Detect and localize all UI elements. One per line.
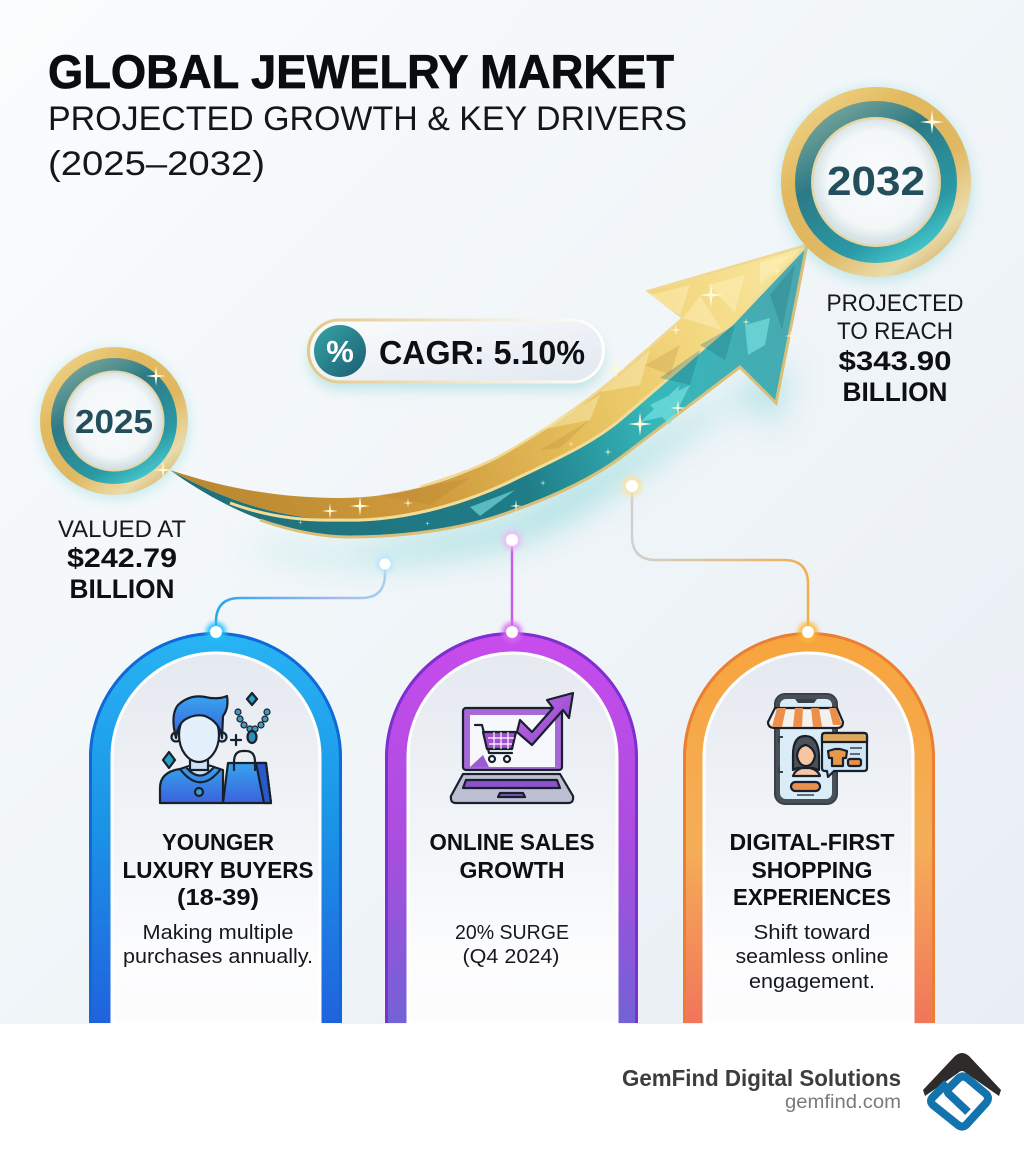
card heading: YOUNGER [162, 829, 274, 855]
start value label [58, 516, 186, 604]
card heading: SHOPPING [752, 857, 872, 883]
arrow lower edge stroke [260, 245, 807, 537]
card heading: EXPERIENCES [733, 884, 891, 910]
end value label: $343.90 [838, 346, 952, 376]
card: digital-first shopping [683, 622, 935, 1023]
card heading: ONLINE SALES [430, 829, 594, 855]
card body: 20% SURGE [455, 922, 569, 944]
brand url: gemfind.com [785, 1092, 901, 1113]
card heading: DIGITAL-FIRST [730, 829, 894, 855]
card body: Making multiple [142, 922, 294, 944]
card body: purchases annually. [123, 946, 313, 968]
subtitle: PROJECTED GROWTH & KEY DRIVERS [48, 100, 687, 138]
card body: engagement. [749, 971, 875, 993]
title: GLOBAL JEWELRY MARKET [48, 45, 674, 98]
date range: (2025–2032) [48, 145, 265, 183]
end value label: BILLION [842, 377, 948, 407]
logo [923, 1053, 1001, 1126]
sparkles [298, 267, 797, 526]
end value label: TO REACH [837, 318, 953, 345]
CAGR value: CAGR: 5.10% [379, 334, 585, 371]
card heading [122, 829, 314, 910]
card heading: GROWTH [460, 857, 564, 883]
percent icon: % [326, 334, 354, 369]
arrow teal half [170, 245, 807, 537]
ring: 2025 [38, 347, 190, 500]
growth arrow [170, 245, 807, 563]
percent icon [314, 325, 366, 377]
facets gold [540, 255, 790, 430]
footer [0, 1024, 1024, 1154]
connector: orange [622, 476, 808, 632]
card body [736, 922, 888, 993]
card heading [430, 829, 594, 883]
arrow upper edge stroke [420, 245, 807, 487]
card body [455, 922, 569, 968]
card body: Shift toward [754, 922, 870, 944]
card body: seamless online [736, 946, 888, 968]
card body [123, 922, 313, 968]
icon: phone storefront [768, 694, 867, 804]
start value label: VALUED AT [58, 516, 186, 543]
end value label: PROJECTED [826, 290, 964, 317]
card heading: LUXURY BUYERS [122, 857, 314, 883]
year label: 2032 [827, 158, 925, 204]
ring: 2032 [779, 87, 973, 282]
start value label: BILLION [70, 574, 174, 604]
title block [48, 45, 687, 183]
card heading [730, 829, 894, 910]
card: younger luxury buyers [89, 622, 342, 1023]
CAGR pill [308, 320, 604, 390]
start value label: $242.79 [67, 543, 177, 573]
icon: buyer with bag and necklace [160, 693, 271, 803]
card body: (Q4 2024) [462, 946, 560, 968]
icon: laptop with cart and rising arrow [451, 693, 573, 803]
connector: purple [502, 530, 522, 632]
arrow centre stroke [230, 246, 806, 520]
year label: 2025 [75, 403, 153, 440]
end value label [826, 290, 964, 407]
card heading: (18-39) [177, 884, 259, 910]
card: online sales growth [385, 622, 638, 1023]
connector: blue [216, 555, 394, 632]
facets teal [470, 318, 770, 516]
brand name: GemFind Digital Solutions [622, 1065, 901, 1091]
arrow gold half [170, 245, 807, 520]
